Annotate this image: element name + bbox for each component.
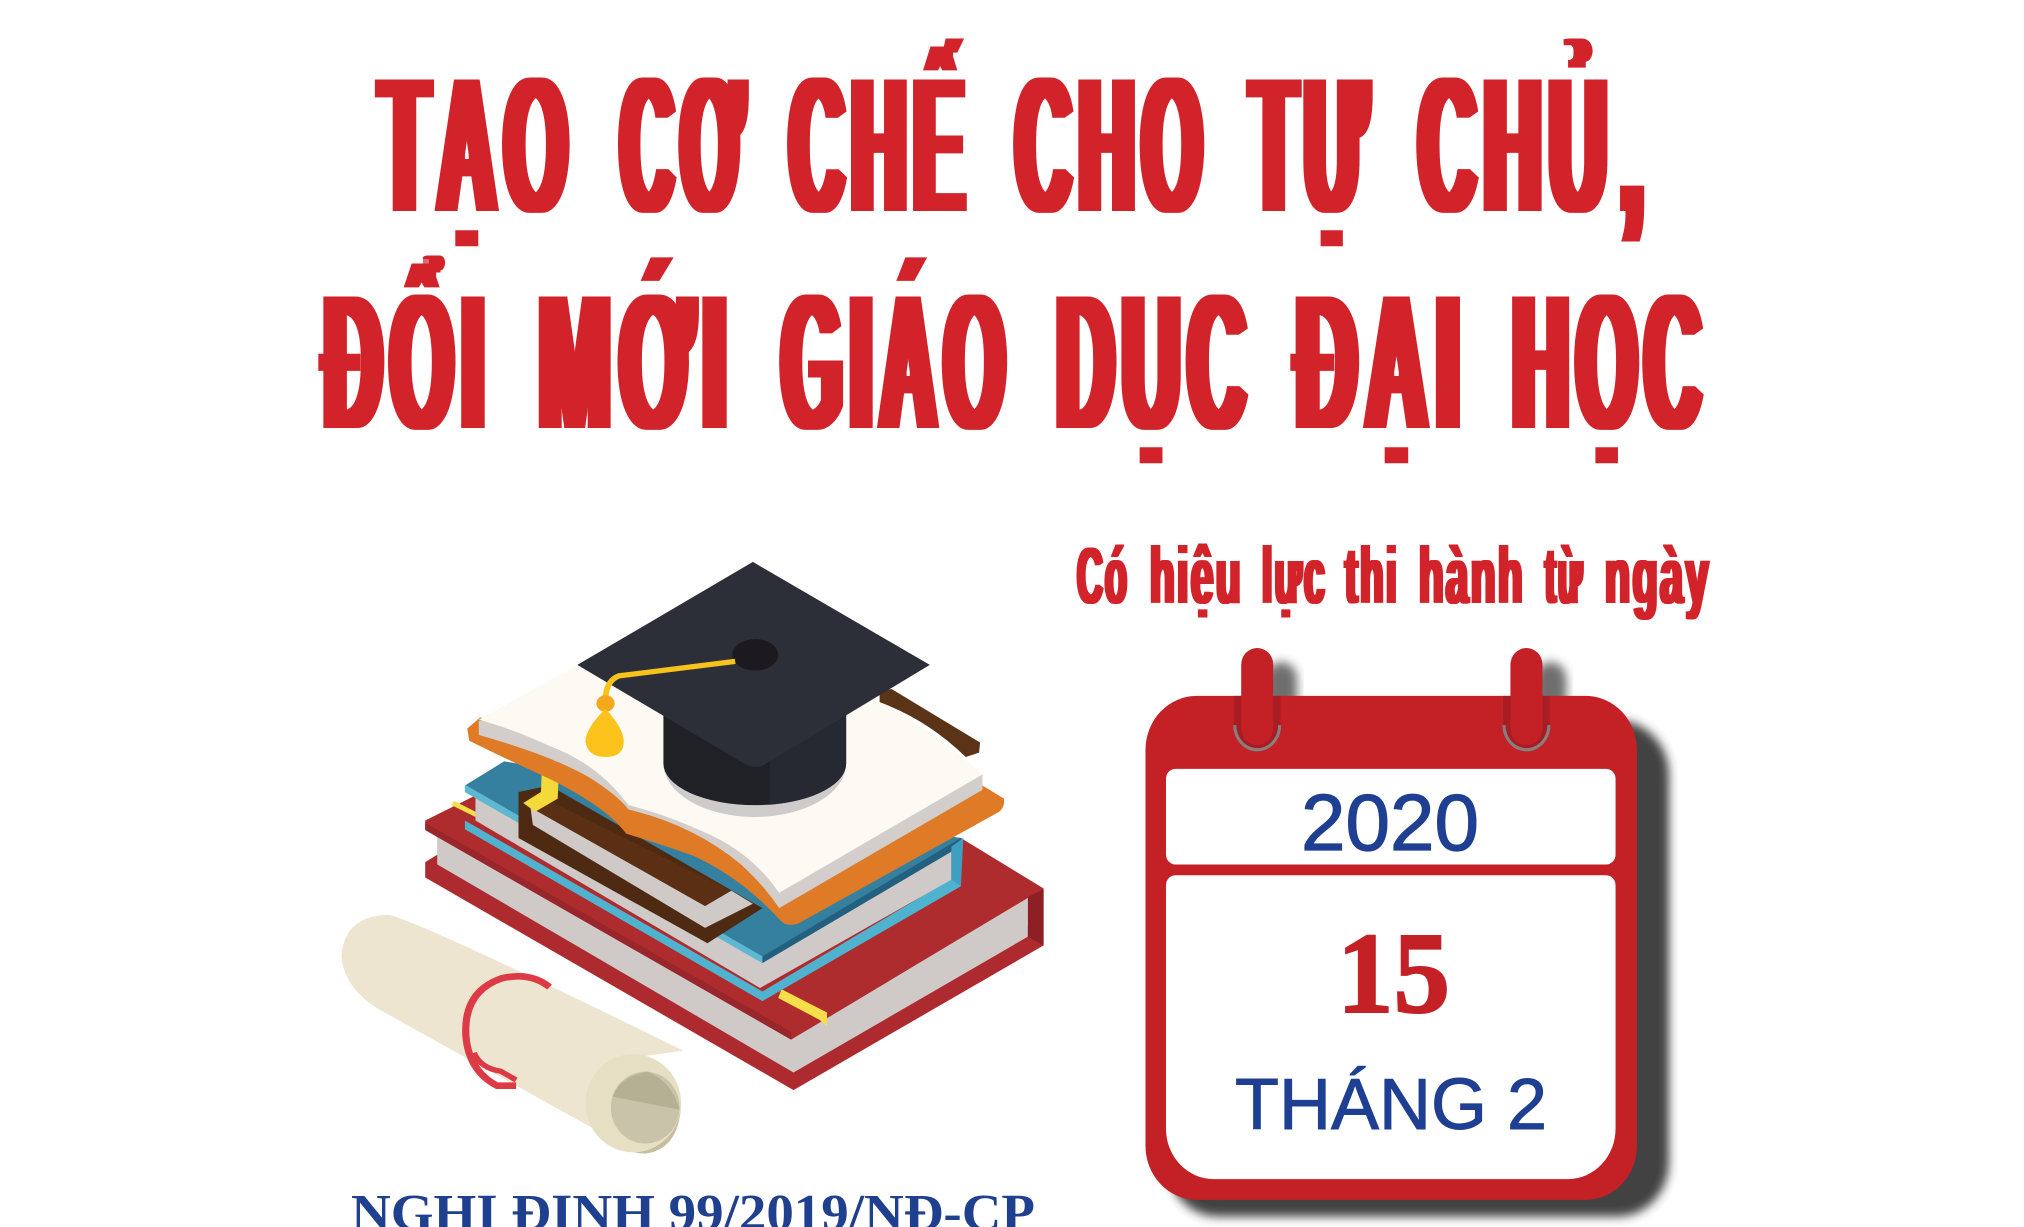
month: THÁNG 2 <box>1235 1065 1547 1145</box>
title: CHẾ <box>790 35 972 255</box>
yellow bookmark <box>523 755 559 812</box>
title: MỚI <box>539 252 736 472</box>
effective date heading: lực <box>1262 531 1327 620</box>
effective date heading: hành <box>1419 531 1525 620</box>
title: ĐẠI <box>1296 252 1469 472</box>
teal book <box>465 761 963 1001</box>
title: , <box>1620 35 1644 255</box>
effective date heading: ngày <box>1605 531 1711 620</box>
effective date heading: từ <box>1545 531 1584 620</box>
title: CHỦ <box>1419 35 1615 255</box>
title: GIÁO <box>782 252 1013 472</box>
infographic canvas: HỌC <box>1513 252 1709 472</box>
title: DỤC <box>1057 252 1254 472</box>
title: ĐỔI <box>324 252 493 472</box>
illustration: stack of books with graduation cap <box>342 562 1044 1154</box>
brown book <box>518 785 762 943</box>
rolled diploma <box>342 915 684 1154</box>
effective date heading <box>1077 531 1711 620</box>
title: TẠO <box>380 35 576 255</box>
title <box>324 35 1709 472</box>
effective date heading: hiệu <box>1150 531 1243 620</box>
title: TỰ <box>1251 35 1375 255</box>
title: CƠ <box>621 35 751 255</box>
day: 15 <box>1337 910 1450 1038</box>
open book <box>467 665 1004 925</box>
calendar <box>1145 648 1669 1217</box>
year: 2020 <box>1301 778 1479 867</box>
effective date heading: thi <box>1345 531 1399 620</box>
red book <box>425 794 1044 1090</box>
title: CHO <box>1016 35 1210 255</box>
graduation cap <box>577 562 930 817</box>
calendar graphic <box>1145 648 1669 1217</box>
effective date heading: Có <box>1077 531 1129 620</box>
